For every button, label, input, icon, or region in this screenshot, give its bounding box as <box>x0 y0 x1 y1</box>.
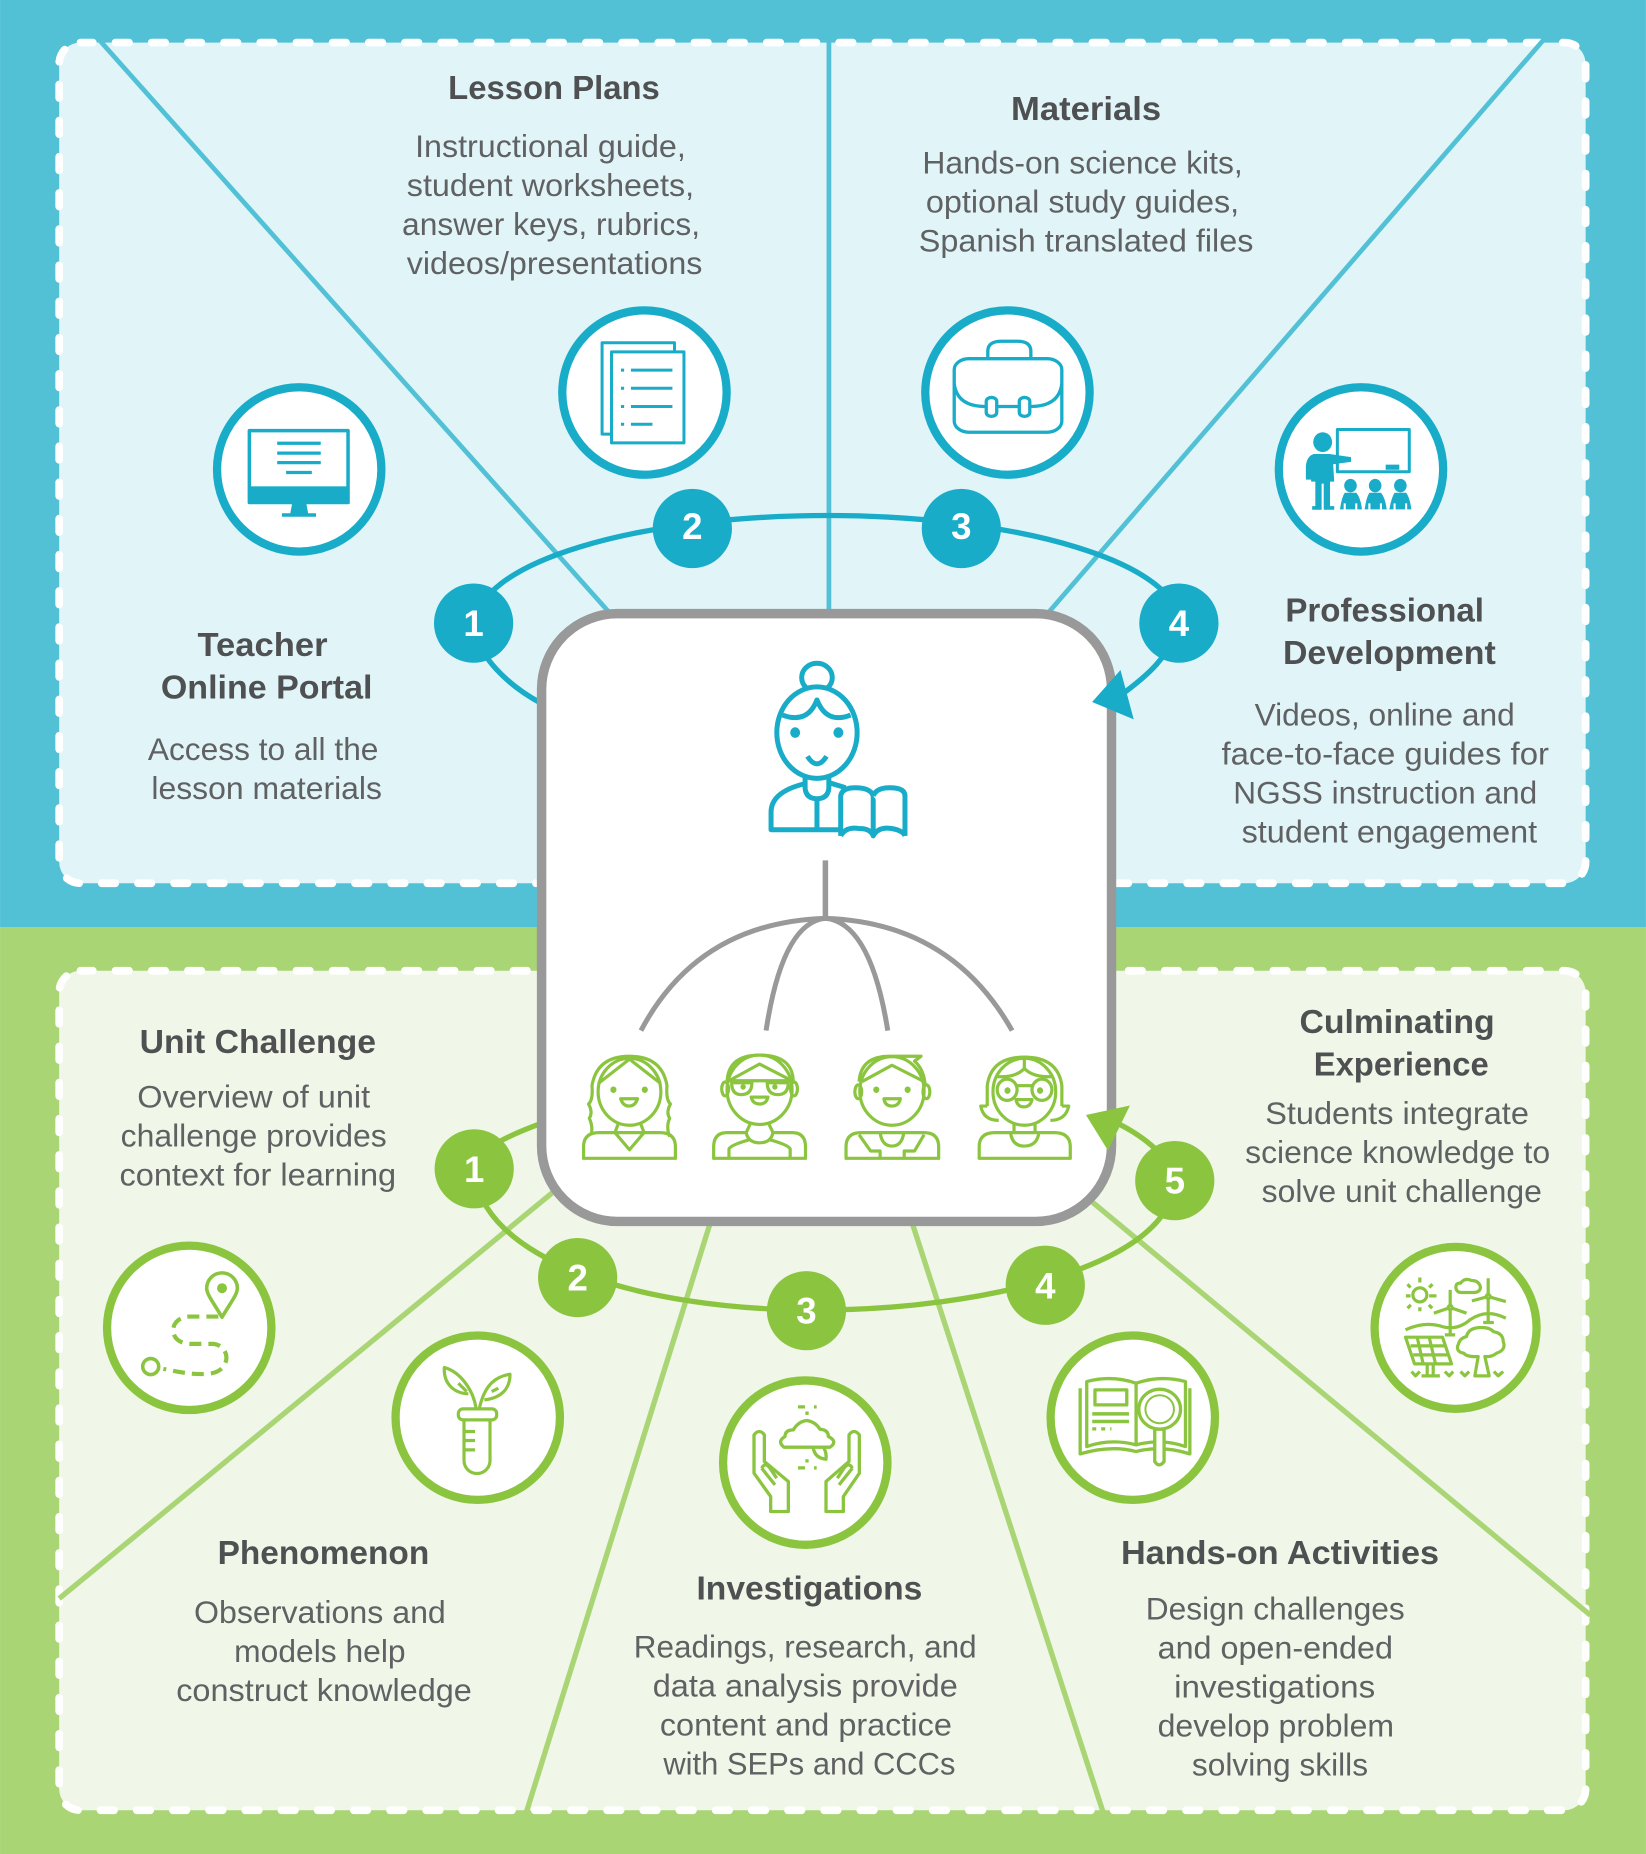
badge: teacher step 2: 2 <box>682 506 703 547</box>
text block: Hands-on Activities: and open-ended <box>1158 1631 1393 1666</box>
text block: Culminating Experience <box>1245 1004 1550 1209</box>
badge: student step 2: 2 <box>567 1258 588 1299</box>
badge: student step 3: 3 <box>796 1291 817 1332</box>
text block: Lesson Plans: student worksheets, <box>407 168 694 203</box>
text block: Materials: Hands-on science kits, <box>922 145 1243 180</box>
panel: student learning sequence <box>59 971 1586 1810</box>
badge: student step 4 <box>1006 1246 1085 1325</box>
text block: Culminating Experience: Experience <box>1314 1047 1489 1084</box>
text block: Professional Development: face-to-face guides for <box>1221 737 1549 772</box>
icon: student four <box>979 1057 1070 1158</box>
text block: Professional Development: Professional <box>1285 593 1484 630</box>
badge: teacher step 1 <box>434 584 513 663</box>
text block: Culminating Experience: science knowledge to <box>1245 1135 1550 1170</box>
text block: Investigations: Investigations <box>696 1570 922 1607</box>
icon: renewable energy landscape <box>1375 1247 1537 1409</box>
icon: hands holding cloud <box>723 1380 887 1545</box>
dividers: student panel <box>59 1192 1590 1813</box>
icon: computer monitor <box>217 387 381 552</box>
text block: Investigations: Readings, research, and <box>634 1629 977 1664</box>
text block: Unit Challenge: challenge provides <box>121 1119 387 1154</box>
icon: teacher at whiteboard <box>1279 387 1443 552</box>
badge: teacher step 1: 1 <box>463 603 484 644</box>
text block: Hands-on Activities: Hands-on Activities <box>1121 1535 1439 1572</box>
connector lines: teacher to students <box>641 860 1012 1031</box>
text block: Lesson Plans: Lesson Plans <box>448 70 660 107</box>
badge: student step 1 <box>435 1129 514 1208</box>
text block: Lesson Plans: videos/presentations <box>407 246 702 281</box>
text block: Materials: Spanish translated files <box>919 223 1253 258</box>
text block: Investigations: data analysis provide <box>653 1668 958 1703</box>
text block: Culminating Experience: solve unit challenge <box>1262 1174 1542 1209</box>
text block: Unit Challenge <box>119 1024 396 1193</box>
text block: Phenomenon: models help <box>234 1634 406 1669</box>
text block: Materials: optional study guides, <box>926 184 1239 219</box>
icon: open book with magnifier <box>1051 1336 1215 1500</box>
text block: Materials: Materials <box>1011 91 1161 128</box>
panel: teacher resources <box>59 43 1586 883</box>
badge: teacher step 4: 4 <box>1169 603 1190 644</box>
icon: lesson plan pages <box>562 310 727 475</box>
background: top band <box>0 0 1646 927</box>
text block: Professional Development: Videos, online and <box>1255 698 1515 733</box>
arrow: student cycle returning <box>1086 1106 1130 1150</box>
text block: Hands-on Activities <box>1121 1535 1439 1783</box>
badge: student step 2 <box>538 1238 617 1317</box>
text block: Teacher Online Portal <box>148 627 382 806</box>
text block: Professional Development: Development <box>1283 635 1496 672</box>
text block: Lesson Plans: Instructional guide, <box>415 129 686 164</box>
icon: student one <box>584 1056 675 1158</box>
cycle ring: students <box>474 1123 1174 1310</box>
background: bottom band <box>0 927 1646 1854</box>
text block: Phenomenon: Observations and <box>194 1595 446 1630</box>
badge: student step 3 <box>767 1271 846 1350</box>
text block: Materials <box>919 91 1253 258</box>
text block: Investigations <box>634 1570 977 1781</box>
badge: student step 4: 4 <box>1035 1265 1056 1306</box>
badge: teacher step 3 <box>922 489 1001 568</box>
icon: test tube with plant <box>396 1336 560 1500</box>
badge: teacher step 3: 3 <box>951 506 972 547</box>
text block: Professional Development: student engagement <box>1242 815 1537 850</box>
text block: Hands-on Activities: investigations <box>1174 1670 1375 1705</box>
text block: Investigations: with SEPs and CCCs <box>662 1746 955 1781</box>
text block: Teacher Online Portal: lesson materials <box>151 771 382 806</box>
cycle ring: teacher <box>473 516 1179 704</box>
text block: Teacher Online Portal: Online Portal <box>161 669 373 706</box>
badge: teacher step 2 <box>653 489 732 568</box>
text block: Unit Challenge: Overview of unit <box>137 1080 370 1115</box>
text block: Phenomenon: Phenomenon <box>218 1535 429 1572</box>
text block: Culminating Experience: Students integrate <box>1265 1096 1529 1131</box>
text block: Hands-on Activities: solving skills <box>1192 1748 1368 1783</box>
text block: Lesson Plans <box>402 70 702 281</box>
text block: Professional Development <box>1221 593 1549 850</box>
text block: Teacher Online Portal: Teacher <box>198 627 328 664</box>
text block: Investigations: content and practice <box>660 1707 952 1742</box>
icon: map route with pin <box>107 1246 271 1410</box>
text block: Professional Development: NGSS instruction and <box>1233 776 1537 811</box>
text block: Unit Challenge: Unit Challenge <box>140 1024 376 1061</box>
dividers: teacher panel <box>101 39 1544 615</box>
text block: Unit Challenge: context for learning <box>119 1158 396 1193</box>
icon: student two <box>714 1055 805 1158</box>
arrow: teacher cycle returning <box>1092 670 1134 719</box>
badge: teacher step 4 <box>1139 584 1219 663</box>
icon: briefcase <box>925 310 1090 475</box>
text block: Phenomenon: construct knowledge <box>176 1673 472 1708</box>
badge: student step 5 <box>1135 1141 1214 1220</box>
text block: Phenomenon <box>176 1535 472 1708</box>
badge: student step 5: 5 <box>1165 1161 1185 1202</box>
text block: Culminating Experience: Culminating <box>1300 1004 1495 1041</box>
text block: Lesson Plans: answer keys, rubrics, <box>402 207 700 242</box>
icon: student three <box>846 1056 939 1158</box>
badge: student step 1: 1 <box>464 1149 484 1190</box>
text block: Hands-on Activities: develop problem <box>1158 1709 1394 1744</box>
text block: Teacher Online Portal: Access to all the <box>148 732 378 767</box>
icon: teacher with book <box>771 663 905 836</box>
central box <box>542 614 1112 1221</box>
text block: Hands-on Activities: Design challenges <box>1146 1592 1405 1627</box>
